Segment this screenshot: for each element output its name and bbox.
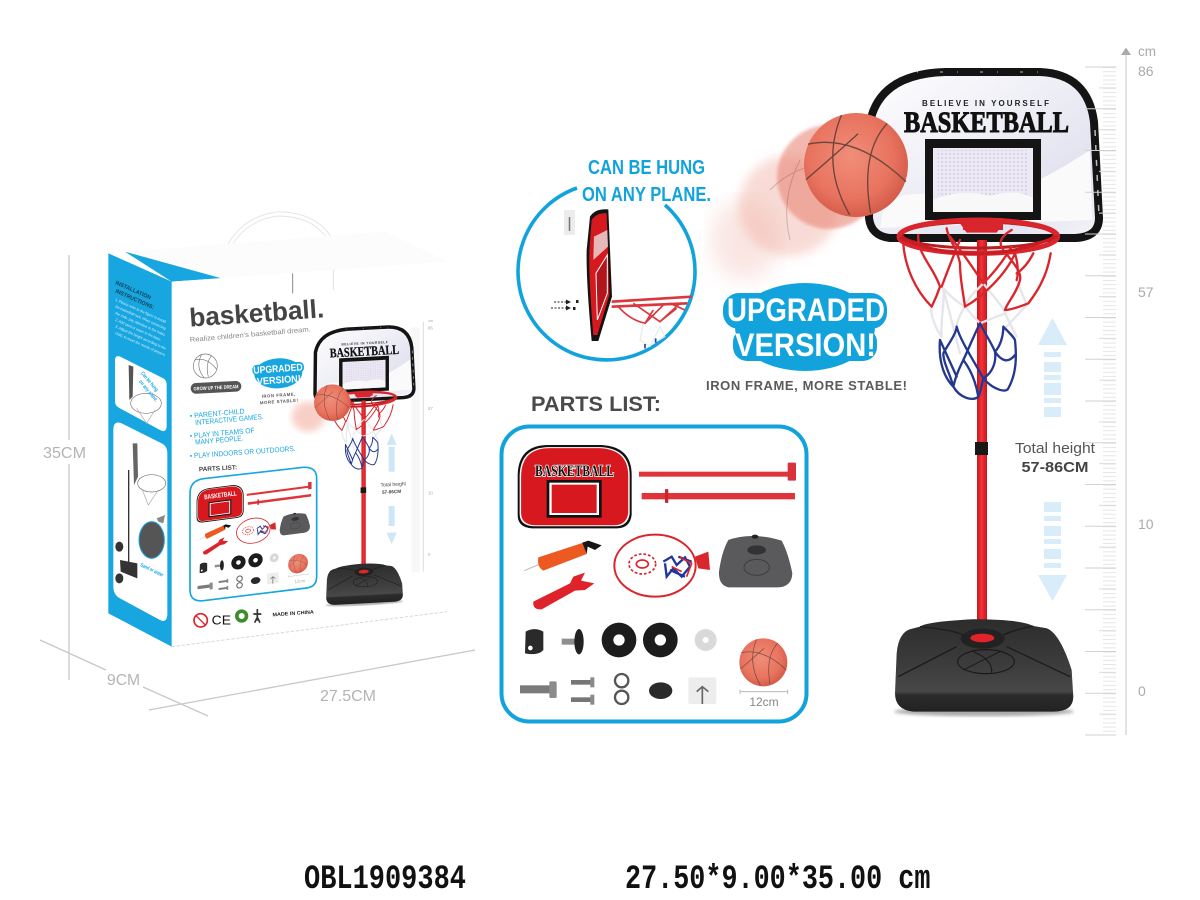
iron frame caption: MORE STABLE! bbox=[260, 398, 299, 405]
blue flap corner bbox=[125, 252, 222, 282]
box front face bbox=[172, 262, 448, 647]
certification icons bbox=[194, 609, 314, 627]
mini ball bbox=[314, 384, 351, 421]
box handle bbox=[223, 214, 337, 260]
box mini ruler: cm bbox=[428, 319, 433, 323]
backboard tagline: BELIEVE IN YOURSELF bbox=[922, 99, 1049, 108]
feature bullets: MANY PEOPLE. bbox=[195, 433, 244, 447]
icon: wall hook bbox=[564, 210, 575, 235]
panel: hanging inset circle bbox=[518, 188, 695, 360]
feature bullets: • PARENT-CHILD bbox=[189, 407, 245, 420]
side instructions text: the rods, pay attention to the holes. bbox=[115, 311, 166, 337]
height ruler bbox=[1085, 44, 1156, 735]
arrow: up bbox=[1038, 318, 1067, 417]
side heading: INSTALLATION bbox=[114, 280, 152, 301]
front subtitle: Realize children's basketball dream. bbox=[190, 326, 311, 344]
mini total height: Total height bbox=[380, 481, 407, 489]
side instructions text: child, to meet the needs of players. bbox=[115, 331, 166, 357]
iron frame caption: IRON FRAME, MORE STABLE! bbox=[706, 378, 907, 393]
box side panel: INSTRUCTIONS: bbox=[114, 289, 155, 311]
side panel: assembly illustration: Sand or water bbox=[139, 562, 164, 579]
ruler label 10: 10 bbox=[1138, 516, 1154, 532]
mini backboard heading: BASKETBALL bbox=[329, 342, 399, 360]
arrow: down bbox=[1038, 502, 1067, 601]
grow up badge bbox=[190, 381, 242, 394]
dimension lines and labels bbox=[40, 255, 475, 716]
total height text bbox=[1015, 441, 1095, 476]
assembly arrows bbox=[551, 300, 578, 310]
box top flap bbox=[125, 232, 448, 282]
upgraded version badge: VERSION! bbox=[735, 327, 876, 363]
iron frame caption: IRON FRAME, bbox=[262, 391, 296, 399]
grow up badge: GROW UP THE DREAM bbox=[193, 384, 239, 393]
parts list heading: PARTS LIST: bbox=[531, 393, 661, 416]
feature bullets: • PLAY IN TEAMS OF bbox=[189, 426, 255, 440]
iron frame caption bbox=[259, 391, 299, 405]
front title: basketball. bbox=[188, 293, 325, 333]
box mini ruler: 57 bbox=[428, 406, 433, 411]
side instructions text: 2. Add sand or water to the base. bbox=[115, 318, 162, 342]
label: height: 35CM bbox=[43, 445, 86, 462]
callout: can be hung heading: CAN BE HUNG bbox=[588, 157, 705, 179]
box mini ruler: 86 bbox=[428, 325, 433, 330]
side panel: hang illustration: on any plane. bbox=[137, 379, 159, 404]
callout: can be hung heading: ON ANY PLANE. bbox=[582, 184, 711, 206]
feature bullets: • PLAY INDOORS OR OUTDOORS. bbox=[190, 444, 296, 460]
panel: parts list bbox=[502, 426, 806, 722]
size label: 12cm bbox=[294, 578, 306, 584]
feature bullets bbox=[189, 407, 296, 460]
box mini ruler: 10 bbox=[428, 491, 433, 496]
parts artwork bbox=[518, 445, 796, 705]
box mini ruler: 0 bbox=[428, 552, 431, 557]
upgraded version badge bbox=[723, 283, 887, 371]
side view backboard bbox=[587, 209, 612, 341]
mini tagline: BELIEVE IN YOURSELF bbox=[341, 340, 389, 347]
item number: OBL1909384 bbox=[304, 860, 466, 899]
product box bbox=[108, 214, 448, 647]
basketball bbox=[804, 113, 908, 217]
callout: can be hung heading bbox=[582, 157, 711, 206]
backboard label: BASKETBALL bbox=[535, 463, 614, 480]
upgraded badge bbox=[252, 357, 305, 390]
side view rim and net bbox=[612, 297, 692, 348]
ruler label 86: 86 bbox=[1138, 63, 1154, 79]
upgraded badge: UPGRADED bbox=[253, 362, 303, 377]
backboard title: BASKETBALL bbox=[904, 106, 1069, 139]
ruler unit: cm bbox=[1138, 44, 1156, 59]
side panel: hang illustration bbox=[115, 356, 167, 431]
side instructions text: 3. Adjust the height according to the bbox=[115, 325, 166, 351]
ruler label 0: 0 bbox=[1138, 683, 1146, 699]
mini trail bbox=[292, 402, 325, 432]
ball size label: 12cm bbox=[749, 695, 779, 709]
feature bullets: INTERACTIVE GAMES. bbox=[195, 412, 264, 427]
box mini hoop: 57-86CM bbox=[382, 489, 401, 495]
icon: ball outline bbox=[193, 354, 217, 378]
label: depth: 9CM bbox=[107, 672, 140, 689]
upgraded badge: VERSION! bbox=[257, 374, 301, 388]
side instructions text bbox=[115, 298, 167, 357]
side panel: assembly illustration bbox=[113, 422, 167, 621]
box mini ruler bbox=[412, 319, 433, 572]
ball motion trail bbox=[711, 125, 881, 280]
main hoop bbox=[865, 68, 1103, 716]
parts list heading: PARTS LIST: bbox=[199, 464, 237, 473]
mini arrows bbox=[387, 433, 397, 544]
upgraded version badge: UPGRADED bbox=[727, 292, 885, 328]
parts panel bbox=[190, 467, 317, 601]
side instructions text: 1. Please refer to the figure to install bbox=[115, 298, 167, 324]
total height text: Total height bbox=[1015, 441, 1095, 457]
box mini hoop bbox=[292, 324, 416, 608]
made in china: MADE IN CHINA bbox=[272, 609, 314, 618]
label: width: 27.5CM bbox=[320, 688, 376, 705]
carton size: 27.50*9.00*35.00 cm bbox=[625, 860, 930, 899]
side instructions text: the basketball rack. When connecting bbox=[115, 305, 166, 331]
board label: BASKETBALL bbox=[204, 490, 237, 501]
certification icons: CE bbox=[212, 612, 231, 627]
total height text: 57-86CM bbox=[1022, 459, 1088, 476]
box side panel bbox=[108, 253, 172, 647]
side panel: hang illustration: Can be hung bbox=[139, 371, 159, 393]
ruler label 57: 57 bbox=[1138, 284, 1154, 300]
